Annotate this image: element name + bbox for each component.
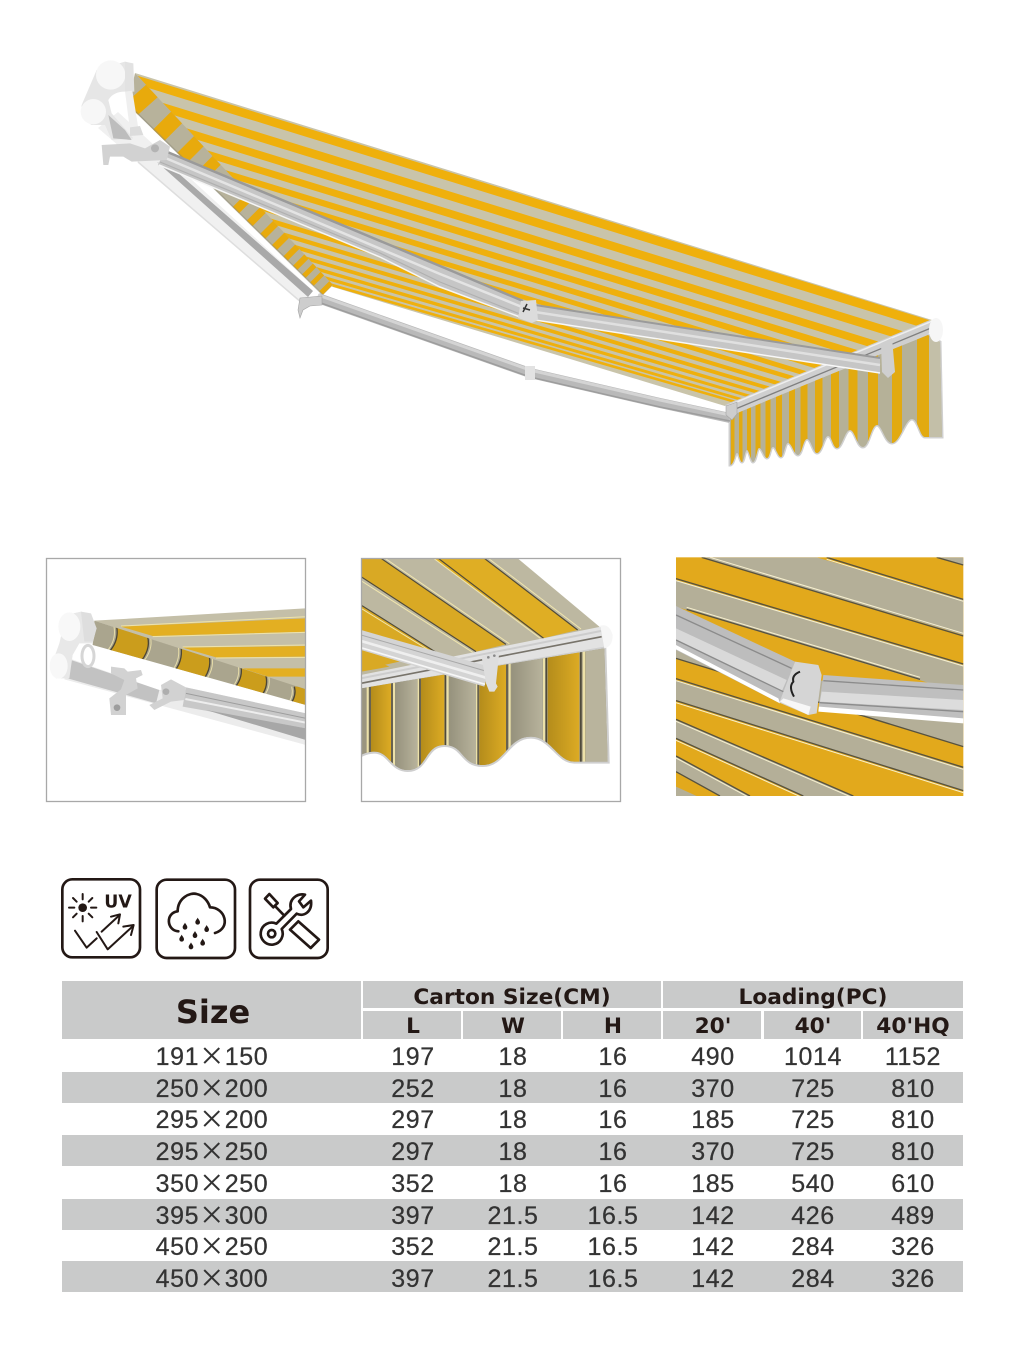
row 395x300: 397 — [391, 1202, 435, 1230]
detail panel: arm elbow — [676, 557, 963, 798]
row 450x300: 326 — [891, 1265, 935, 1293]
row 250x200: 810 — [891, 1075, 935, 1103]
row 395x300 — [156, 1196, 935, 1232]
end caps and hanger — [81, 60, 170, 165]
row 350x250: 540 — [791, 1170, 835, 1198]
row 295x200: 16 — [598, 1106, 628, 1134]
row 295x250: 16 — [598, 1138, 628, 1166]
detail panel: roller and bracket — [46, 558, 306, 802]
row 250x200: 16 — [598, 1075, 628, 1103]
row 450x300: 284 — [791, 1265, 835, 1293]
upper folding arm — [158, 150, 895, 378]
row 250x200: 18 — [498, 1075, 528, 1103]
panel 1 roller — [93, 621, 306, 707]
row 250x200: 250×200 — [156, 1069, 268, 1105]
row 191x150 — [156, 1037, 941, 1073]
row 450x300 — [156, 1259, 935, 1295]
wall end brackets — [298, 296, 737, 420]
row 295x250: 810 — [891, 1138, 935, 1166]
icon: easy installation tools — [250, 880, 328, 958]
row 191x150: 490 — [691, 1043, 735, 1071]
row 450x250: 450×250 — [156, 1227, 268, 1263]
icon: rain resistance — [157, 880, 235, 958]
row 395x300: 489 — [891, 1202, 935, 1230]
feature icons — [62, 879, 328, 958]
table header: Loading(PC) — [739, 985, 887, 1010]
front bar — [725, 318, 943, 414]
row 350x250: 185 — [691, 1170, 735, 1198]
row 350x250: 350×250 — [156, 1164, 268, 1200]
row 295x250 — [156, 1132, 935, 1168]
table header: 20' — [695, 1014, 731, 1039]
row 350x250: 352 — [391, 1170, 435, 1198]
row 450x250: 352 — [391, 1233, 435, 1261]
row 191x150: 1152 — [885, 1043, 941, 1071]
row 395x300: 16.5 — [587, 1202, 639, 1230]
panel 1 wall bar and arm — [64, 658, 306, 745]
table header: Carton Size(CM) — [413, 985, 611, 1010]
row 295x200: 297 — [391, 1106, 435, 1134]
row 395x300: 395×300 — [156, 1196, 268, 1232]
panel 2 valance — [359, 642, 609, 775]
row 350x250 — [156, 1164, 935, 1200]
panel 1 end caps — [56, 612, 97, 678]
row 295x200: 725 — [791, 1106, 835, 1134]
row 450x250: 16.5 — [587, 1233, 639, 1261]
row 295x200: 185 — [691, 1106, 735, 1134]
row 250x200 — [156, 1069, 935, 1105]
panel 1 brackets — [109, 667, 186, 715]
row 395x300: 21.5 — [487, 1202, 539, 1230]
row 295x200 — [156, 1100, 935, 1136]
wall bar — [98, 112, 313, 305]
row 250x200: 370 — [691, 1075, 735, 1103]
awning canopy with stripes — [135, 73, 932, 406]
row 450x250: 284 — [791, 1233, 835, 1261]
specification table — [62, 981, 963, 1295]
row 191x150: 18 — [498, 1043, 528, 1071]
panel 1 canopy — [94, 608, 306, 690]
table header: Size — [176, 993, 250, 1031]
row 350x250: 610 — [891, 1170, 935, 1198]
row 250x200: 252 — [391, 1075, 435, 1103]
row 350x250: 16 — [598, 1170, 628, 1198]
awning valance — [725, 330, 945, 470]
table header — [62, 981, 963, 1039]
panel 3 stripes — [676, 557, 963, 798]
row 450x300: 450×300 — [156, 1259, 268, 1295]
row 450x250: 21.5 — [487, 1233, 539, 1261]
icon: UV resistance: UV — [104, 892, 132, 912]
row 191x150: 16 — [598, 1043, 628, 1071]
table header: 40' — [795, 1014, 831, 1039]
table row stripes — [62, 1072, 963, 1292]
row 450x300: 21.5 — [487, 1265, 539, 1293]
row 295x250: 297 — [391, 1138, 435, 1166]
row 450x250: 142 — [691, 1233, 735, 1261]
row 191x150: 191×150 — [156, 1037, 268, 1073]
row 191x150: 197 — [391, 1043, 435, 1071]
row 295x200: 295×200 — [156, 1100, 268, 1136]
row 295x250: 725 — [791, 1138, 835, 1166]
lower folding arm — [318, 295, 730, 421]
panel 2 front bar — [361, 625, 613, 688]
row 295x250: 370 — [691, 1138, 735, 1166]
row 450x300: 16.5 — [587, 1265, 639, 1293]
table header: L — [406, 1014, 420, 1039]
table header: H — [604, 1014, 622, 1039]
row 350x250: 18 — [498, 1170, 528, 1198]
row 250x200: 725 — [791, 1075, 835, 1103]
row 295x250: 18 — [498, 1138, 528, 1166]
row 450x300: 397 — [391, 1265, 435, 1293]
row 295x200: 810 — [891, 1106, 935, 1134]
row 395x300: 426 — [791, 1202, 835, 1230]
row 450x250: 326 — [891, 1233, 935, 1261]
table header: 40'HQ — [876, 1014, 950, 1039]
icon: UV resistance — [62, 879, 140, 957]
main awning illustration — [81, 60, 945, 470]
table header: W — [501, 1014, 525, 1039]
panel 2 canopy — [362, 559, 600, 675]
row 450x300: 142 — [691, 1265, 735, 1293]
row 295x200: 18 — [498, 1106, 528, 1134]
panel 3 arm — [676, 606, 963, 723]
detail panel: front bar and valance — [359, 558, 621, 802]
row 295x250: 295×250 — [156, 1132, 268, 1168]
fabric roller — [126, 73, 340, 302]
row 395x300: 142 — [691, 1202, 735, 1230]
panel 2 arm — [361, 630, 499, 692]
row 450x250 — [156, 1227, 935, 1263]
row 191x150: 1014 — [784, 1043, 842, 1071]
